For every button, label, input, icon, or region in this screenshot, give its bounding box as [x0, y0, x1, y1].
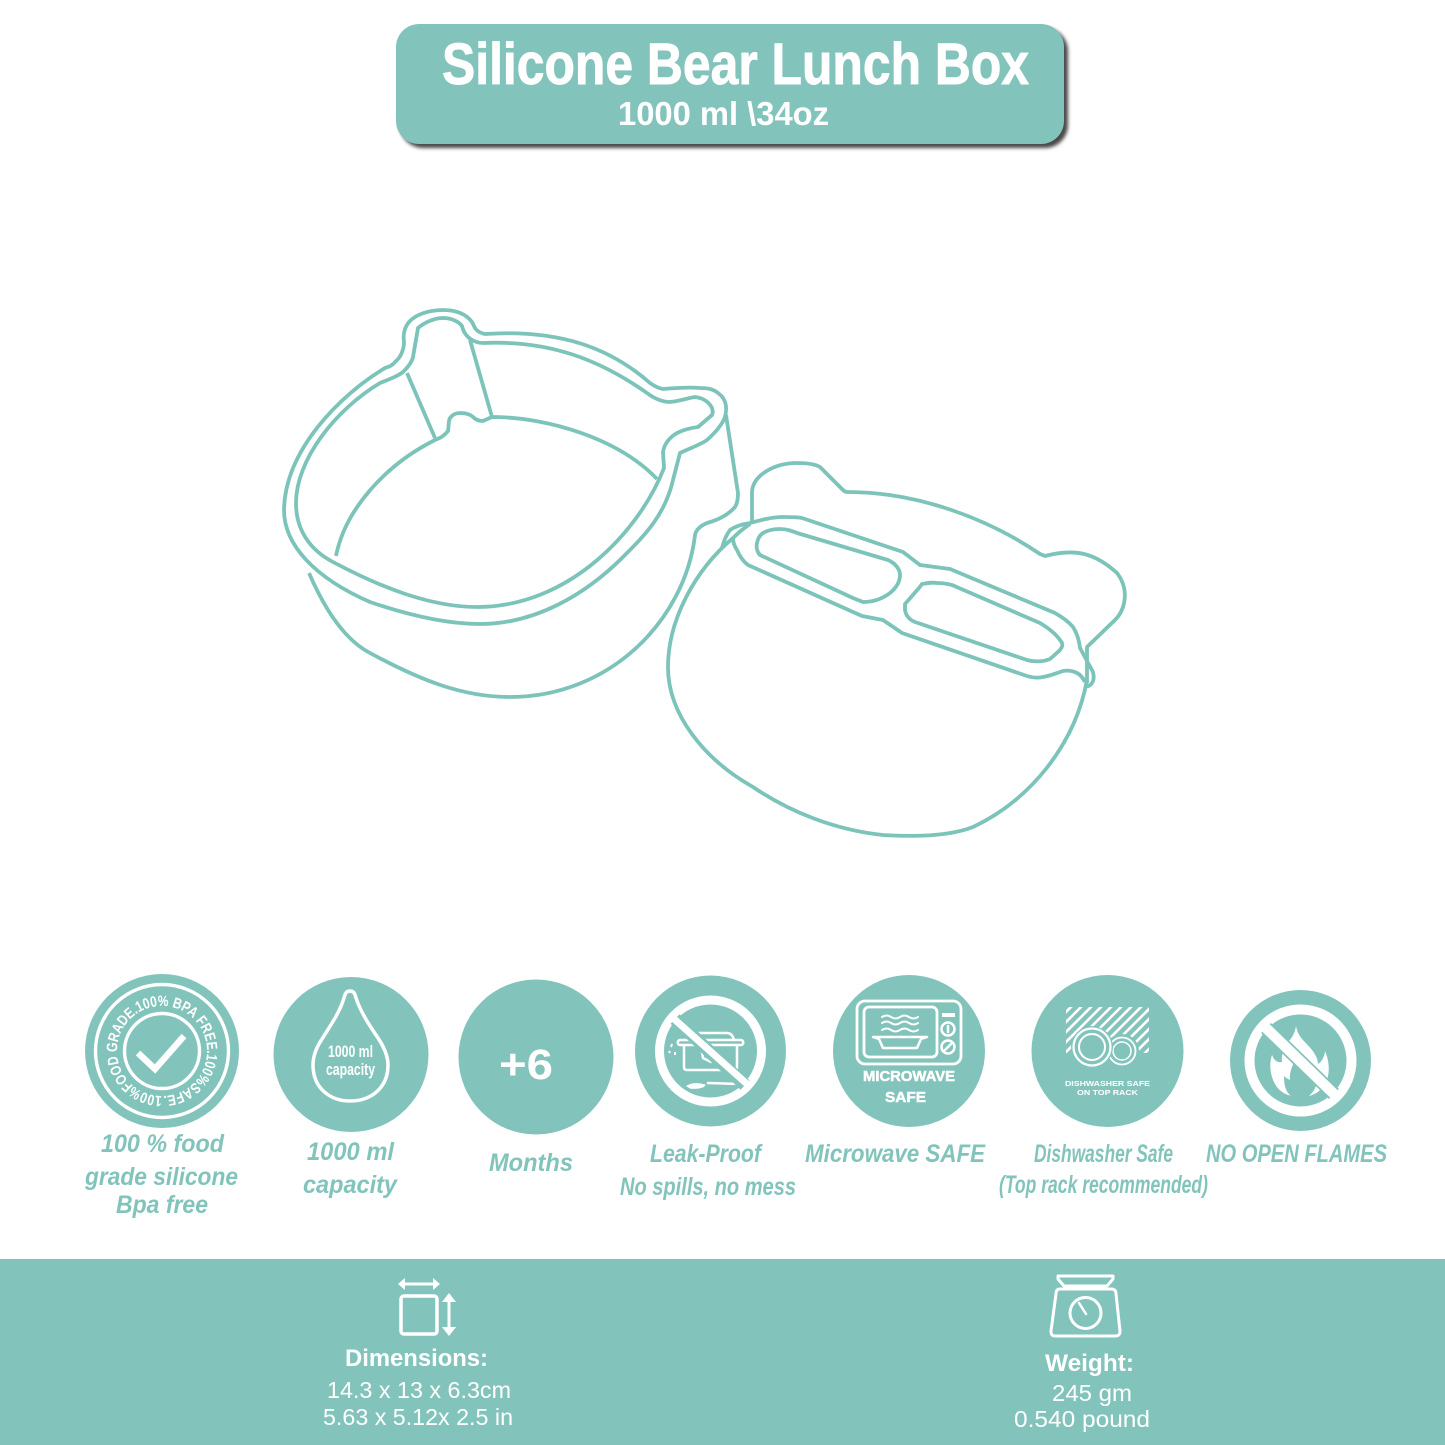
label: food grade: Bpa free [116, 1191, 208, 1219]
lid top with ears [752, 463, 1125, 683]
icon: microwave: MICROWAVE [863, 1069, 955, 1085]
feature: months [458, 980, 614, 1177]
label: food grade: grade silicone [84, 1163, 238, 1191]
icon: kitchen scale [1051, 1276, 1120, 1336]
box floor outline [336, 413, 657, 556]
icon: plus six: +6 [499, 1041, 553, 1089]
subtitle: 1000 ml \34oz [618, 95, 829, 132]
title banner [396, 24, 1068, 148]
icon: no flame [1230, 990, 1371, 1131]
icon: dishwasher plates [1032, 975, 1184, 1127]
panel: feature icons [84, 974, 1387, 1219]
icon: water drop: capacity [326, 1060, 375, 1079]
icon: no leak [635, 976, 786, 1126]
dimension values: 14.3 x 13 x 6.3cm [327, 1377, 511, 1403]
panel: specifications band [0, 1259, 1445, 1445]
feature: dishwasher safe [999, 975, 1208, 1199]
label: food grade: 100 % food [101, 1130, 225, 1158]
label: no open flames: NO OPEN FLAMES [1206, 1140, 1387, 1168]
label: leak proof: No spills, no mess [620, 1173, 796, 1201]
icon: water drop [274, 977, 428, 1132]
label: months: Months [489, 1149, 573, 1177]
weight values: 0.540 pound [1014, 1406, 1150, 1432]
lid vent hole right [905, 583, 1062, 661]
icon: food grade badge: 100%FOOD GRADE.100% BPA FREE.100%SAFE. [106, 996, 218, 1106]
weight values: 245 gm [1052, 1380, 1132, 1406]
label: capacity: 1000 ml [307, 1138, 395, 1166]
icon: dishwasher plates: DISHWASHER SAFE [1065, 1079, 1150, 1088]
icon: water drop: 1000 ml [328, 1042, 373, 1061]
illustration: open bear lunch box [284, 310, 1125, 836]
label: dishwasher safe: (Top rack recommended) [999, 1171, 1208, 1199]
dimension values: 5.63 x 5.12x 2.5 in [323, 1404, 513, 1430]
lid vent hole left [757, 529, 900, 602]
feature: microwave safe [805, 975, 986, 1168]
lid body [668, 538, 1087, 836]
icon: dishwasher plates: ON TOP RACK [1077, 1088, 1139, 1097]
label: microwave safe: Microwave SAFE [805, 1140, 986, 1168]
feature: leak proof [620, 976, 796, 1201]
icon: microwave [833, 975, 985, 1127]
heading: weight: Weight: [1045, 1350, 1134, 1377]
feature: food grade silicone [84, 974, 239, 1219]
label: leak proof: Leak-Proof [650, 1140, 763, 1168]
label: capacity: capacity [303, 1171, 398, 1199]
divider slot lines [407, 340, 492, 438]
icon: microwave: SAFE [885, 1090, 926, 1106]
spec: weight [1014, 1276, 1150, 1432]
feature: capacity [274, 977, 428, 1199]
lid rim inner [733, 524, 1085, 682]
label: dishwasher safe: Dishwasher Safe [1034, 1140, 1173, 1168]
spec: dimensions [323, 1278, 513, 1430]
feature: no open flames [1206, 990, 1387, 1168]
box outer wall [309, 415, 738, 697]
icon: plus six [458, 980, 614, 1134]
icon: food grade badge [85, 974, 239, 1128]
box base outer rim [284, 310, 726, 624]
icon: dimensions [398, 1278, 456, 1336]
heading: dimensions: Dimensions: [345, 1345, 488, 1372]
title: Silicone Bear Lunch Box [442, 32, 1029, 97]
box base inner rim [296, 318, 713, 607]
lid rim outer [722, 517, 1094, 686]
